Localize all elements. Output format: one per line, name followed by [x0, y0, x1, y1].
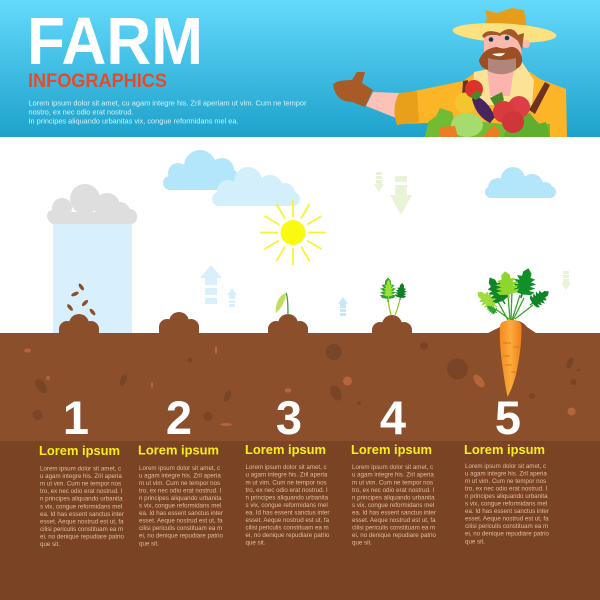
body 4: ea. Id has essent sanctus inter	[352, 510, 436, 517]
body 4: m ut vim. Cum ne tempor nos	[352, 479, 433, 486]
hat brim	[452, 21, 557, 45]
smile	[492, 53, 505, 56]
body 4	[352, 464, 436, 547]
body 3: que sit.	[246, 540, 266, 547]
body 3: s vix, congue reformidans mel	[246, 502, 328, 509]
body 4: cilisi periculis constituam ea m	[352, 525, 435, 532]
body 5: Lorem ipsum dolor sit amet, c	[465, 463, 546, 470]
body 4: s vix, congue reformidans mel	[352, 502, 434, 509]
neck	[487, 68, 514, 96]
blue cloud left	[163, 150, 241, 190]
body 3: esset. Aeque nostrud est ut, fa	[246, 517, 330, 524]
body 5: u agam integre his. Zril aperia	[465, 470, 547, 477]
header banner	[0, 0, 600, 137]
body 2: n principes aliquando urbanita	[139, 495, 222, 502]
step numbers: 4	[380, 391, 406, 444]
ear	[522, 40, 530, 48]
step 3 text	[245, 442, 330, 547]
body 1: ea. Id has essent sanctus inter	[40, 511, 124, 518]
step numbers	[63, 391, 521, 444]
step numbers: 5	[495, 391, 521, 444]
body 3	[246, 464, 330, 547]
body 2: s vix, congue reformidans mel	[139, 503, 221, 510]
mounds	[59, 312, 536, 338]
shirt body	[400, 72, 567, 137]
arrow: small down	[374, 172, 384, 192]
body 2: u agam integre his. Zril aperia	[139, 472, 221, 479]
heading 4: Lorem ipsum	[351, 442, 432, 457]
step numbers: 1	[63, 391, 89, 444]
step 2 text	[138, 442, 223, 547]
heading 2: Lorem ipsum	[138, 442, 219, 458]
body 5: que sit.	[465, 538, 485, 545]
body 1: tro, ex nec odio erat nostrud. I	[40, 488, 122, 495]
body 3: Lorem ipsum dolor sit amet, c	[246, 464, 327, 471]
beard	[479, 47, 522, 70]
header paragraph: Lorem ipsum dolor sit amet, cu agam integre his. Zril aperiam ut vim. Cum ne tempor	[28, 98, 307, 108]
header paragraph	[28, 98, 307, 126]
carrot leaves	[472, 265, 553, 320]
body 5: esset. Aeque nostrud est ut, fa	[465, 516, 549, 523]
body 4: Lorem ipsum dolor sit amet, c	[352, 464, 433, 471]
header paragraph: In principes aliquando urbanitas vix, congue reformidans mel ea.	[28, 116, 238, 126]
body 2: ei, no denique repudiare patrio	[139, 533, 223, 540]
seedling	[380, 278, 408, 315]
body 2: tro, ex nec odio erat nostrud. I	[139, 487, 221, 494]
body 1	[40, 466, 124, 548]
sprout	[276, 293, 288, 315]
body 3: m ut vim. Cum ne tempor nos	[246, 479, 327, 486]
body 1: s vix, congue reformidans mel	[40, 503, 122, 510]
soil	[0, 333, 600, 441]
body 4: u agam integre his. Zril aperia	[352, 472, 434, 479]
body 5: s vix, congue reformidans mel	[465, 501, 547, 508]
arrow: large down	[390, 176, 412, 215]
arrow: small up	[227, 288, 237, 307]
title: FARM: FARM	[27, 4, 203, 79]
rain column	[53, 224, 132, 334]
heading 3: Lorem ipsum	[245, 442, 326, 457]
body 2: que sit.	[139, 540, 159, 547]
body 1: u agam integre his. Zril aperia	[40, 473, 122, 480]
body 1: esset. Aeque nostrud est ut, fa	[40, 518, 124, 525]
bare arm	[366, 92, 400, 118]
eyes	[489, 37, 493, 42]
step 4 text	[351, 442, 436, 547]
body 3: n principes aliquando urbanita	[246, 494, 329, 501]
body 3: ea. Id has essent sanctus inter	[246, 510, 329, 517]
carrot root	[500, 320, 522, 397]
subtitle: INFOGRAPHICS: INFOGRAPHICS	[28, 70, 167, 92]
body 1: que sit.	[40, 541, 60, 548]
body 1: Lorem ipsum dolor sit amet, c	[40, 466, 121, 472]
pale cloud	[212, 167, 300, 206]
body 3: cilisi periculis constituam ea m	[246, 525, 329, 532]
step 5 text	[464, 442, 549, 545]
body 4: n principes aliquando urbanita	[352, 494, 435, 501]
step numbers: 2	[166, 391, 192, 444]
body 4: ei, no denique repudiare patrio	[352, 532, 436, 539]
body 3: ei, no denique repudiare patrio	[246, 532, 330, 539]
body 4: que sit.	[352, 540, 372, 547]
body 3: u agam integre his. Zril aperia	[246, 472, 328, 479]
body 2: m ut vim. Cum ne tempor nos	[139, 480, 220, 487]
body 5: cilisi periculis constituam ea m	[465, 523, 548, 530]
heading 5: Lorem ipsum	[464, 442, 545, 457]
body 2	[139, 465, 223, 547]
hat crown	[484, 8, 527, 28]
step 1 text	[39, 443, 124, 548]
body 5	[465, 463, 549, 545]
body 1: ei, no denique repudiare patrio	[40, 533, 124, 540]
body 2: cilisi periculis constituam ea m	[139, 525, 222, 532]
chin	[488, 56, 517, 74]
light soil stones	[24, 346, 576, 426]
hair and brows	[482, 29, 524, 50]
arrow: small up right	[338, 297, 348, 316]
body 5: ea. Id has essent sanctus inter	[465, 508, 549, 515]
body 2: esset. Aeque nostrud est ut, fa	[139, 518, 223, 525]
body 5: ei, no denique repudiare patrio	[465, 531, 549, 538]
header paragraph: nostro, ex nec odio erat nostrud.	[28, 108, 134, 116]
soil lower band	[0, 441, 600, 600]
body 5: m ut vim. Cum ne tempor nos	[465, 478, 546, 485]
seeds	[66, 283, 96, 316]
body 5: n principes aliquando urbanita	[465, 493, 548, 500]
farmer illustration	[333, 8, 567, 137]
body 1: n principes aliquando urbanita	[40, 496, 123, 503]
glove	[333, 72, 373, 107]
face	[484, 35, 522, 72]
soil spots	[32, 342, 580, 421]
body 2: Lorem ipsum dolor sit amet, c	[139, 465, 220, 472]
gray rain cloud	[47, 184, 137, 224]
body 1: m ut vim. Cum ne tempor nos	[40, 481, 121, 488]
body 3: tro, ex nec odio erat nostrud. I	[246, 487, 328, 494]
blue cloud right	[485, 167, 556, 198]
arrow: large up	[200, 265, 222, 304]
vegetables	[425, 80, 550, 137]
collar	[472, 62, 534, 105]
body 2: ea. Id has essent sanctus inter	[139, 510, 223, 517]
suspenders	[462, 80, 550, 114]
sun	[260, 200, 326, 265]
heading 1: Lorem ipsum	[39, 443, 120, 458]
arrow: small down right	[561, 271, 571, 290]
step numbers: 3	[276, 391, 302, 444]
body 4: esset. Aeque nostrud est ut, fa	[352, 517, 436, 524]
body 1: cilisi periculis constituam ea m	[40, 526, 123, 533]
body 4: tro, ex nec odio erat nostrud. I	[352, 487, 434, 494]
body 5: tro, ex nec odio erat nostrud. I	[465, 485, 547, 492]
sleeve cuff	[394, 91, 419, 125]
